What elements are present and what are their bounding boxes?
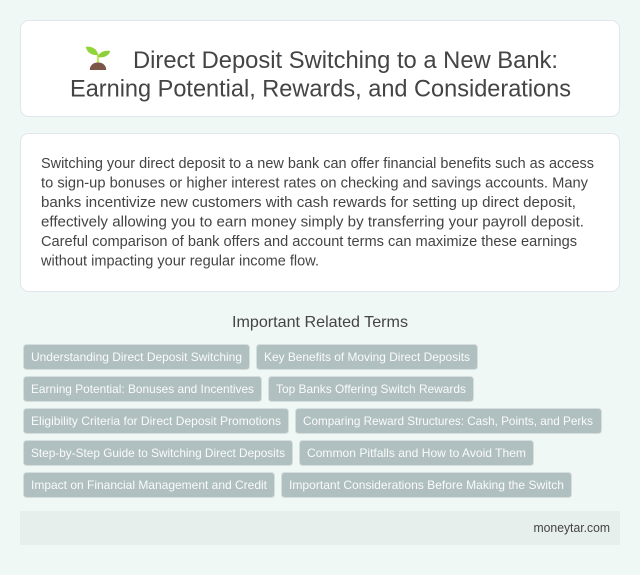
tag: earning potential: Earning Potential: Bonuses and Incentives (31, 382, 254, 396)
tag: common pitfalls (300, 440, 534, 466)
tag: important considerations (282, 472, 572, 498)
tag: comparing reward structures (296, 408, 602, 434)
title: Earning Potential, Rewards, and Considerations (70, 76, 571, 102)
tag: understanding direct deposit switching (24, 344, 250, 370)
footer source text: moneytar.com (534, 520, 610, 535)
summary text: to sign-up bonuses or higher interest rates on checking and savings accounts. Many (41, 174, 588, 192)
tag: top banks (268, 376, 474, 402)
summary text (40, 155, 594, 270)
tag: impact on financial management (24, 472, 274, 498)
panel: title card (20, 20, 620, 116)
panel: related term tags (24, 344, 602, 498)
title: Direct Deposit Switching to a New Bank: (133, 47, 558, 74)
tag: top banks: Top Banks Offering Switch Rewards (276, 382, 466, 396)
tag: key benefits (256, 344, 478, 370)
summary text: effectively allowing you to earn money simply by transferring your payroll deposit. (41, 214, 584, 230)
heading: related terms: Important Related Terms (232, 314, 408, 331)
title (70, 47, 571, 102)
tag: understanding direct deposit switching: Understanding Direct Deposit Switching (31, 350, 242, 364)
tag: comparing reward structures: Comparing Reward Structures: Cash, Points, and Perks (303, 414, 593, 428)
summary text: without impacting your regular income flow. (40, 252, 319, 270)
tag: common pitfalls: Common Pitfalls and How to Avoid Them (307, 446, 526, 460)
summary text: banks incentivize new customers with cash rewards for setting up direct deposit, (41, 194, 576, 211)
tag: eligibility criteria (24, 408, 288, 434)
summary text: Careful comparison of bank offers and account terms can maximize these earnings (41, 233, 577, 250)
tag: important considerations: Important Considerations Before Making the Switch (289, 478, 564, 492)
tag: eligibility criteria: Eligibility Criteria for Direct Deposit Promotions (31, 414, 281, 428)
summary text: Switching your direct deposit to a new bank can offer financial benefits such as access (41, 155, 594, 172)
panel: summary card (20, 134, 620, 292)
tag: earning potential (24, 376, 262, 402)
tag: step-by-step guide (24, 440, 292, 466)
tag: impact on financial management: Impact on Financial Management and Credit (31, 478, 268, 492)
tag: key benefits: Key Benefits of Moving Direct Deposits (264, 350, 470, 364)
icon: seedling (86, 47, 110, 70)
tag: step-by-step guide: Step-by-Step Guide to Switching Direct Deposits (31, 446, 285, 460)
footer (20, 511, 620, 545)
